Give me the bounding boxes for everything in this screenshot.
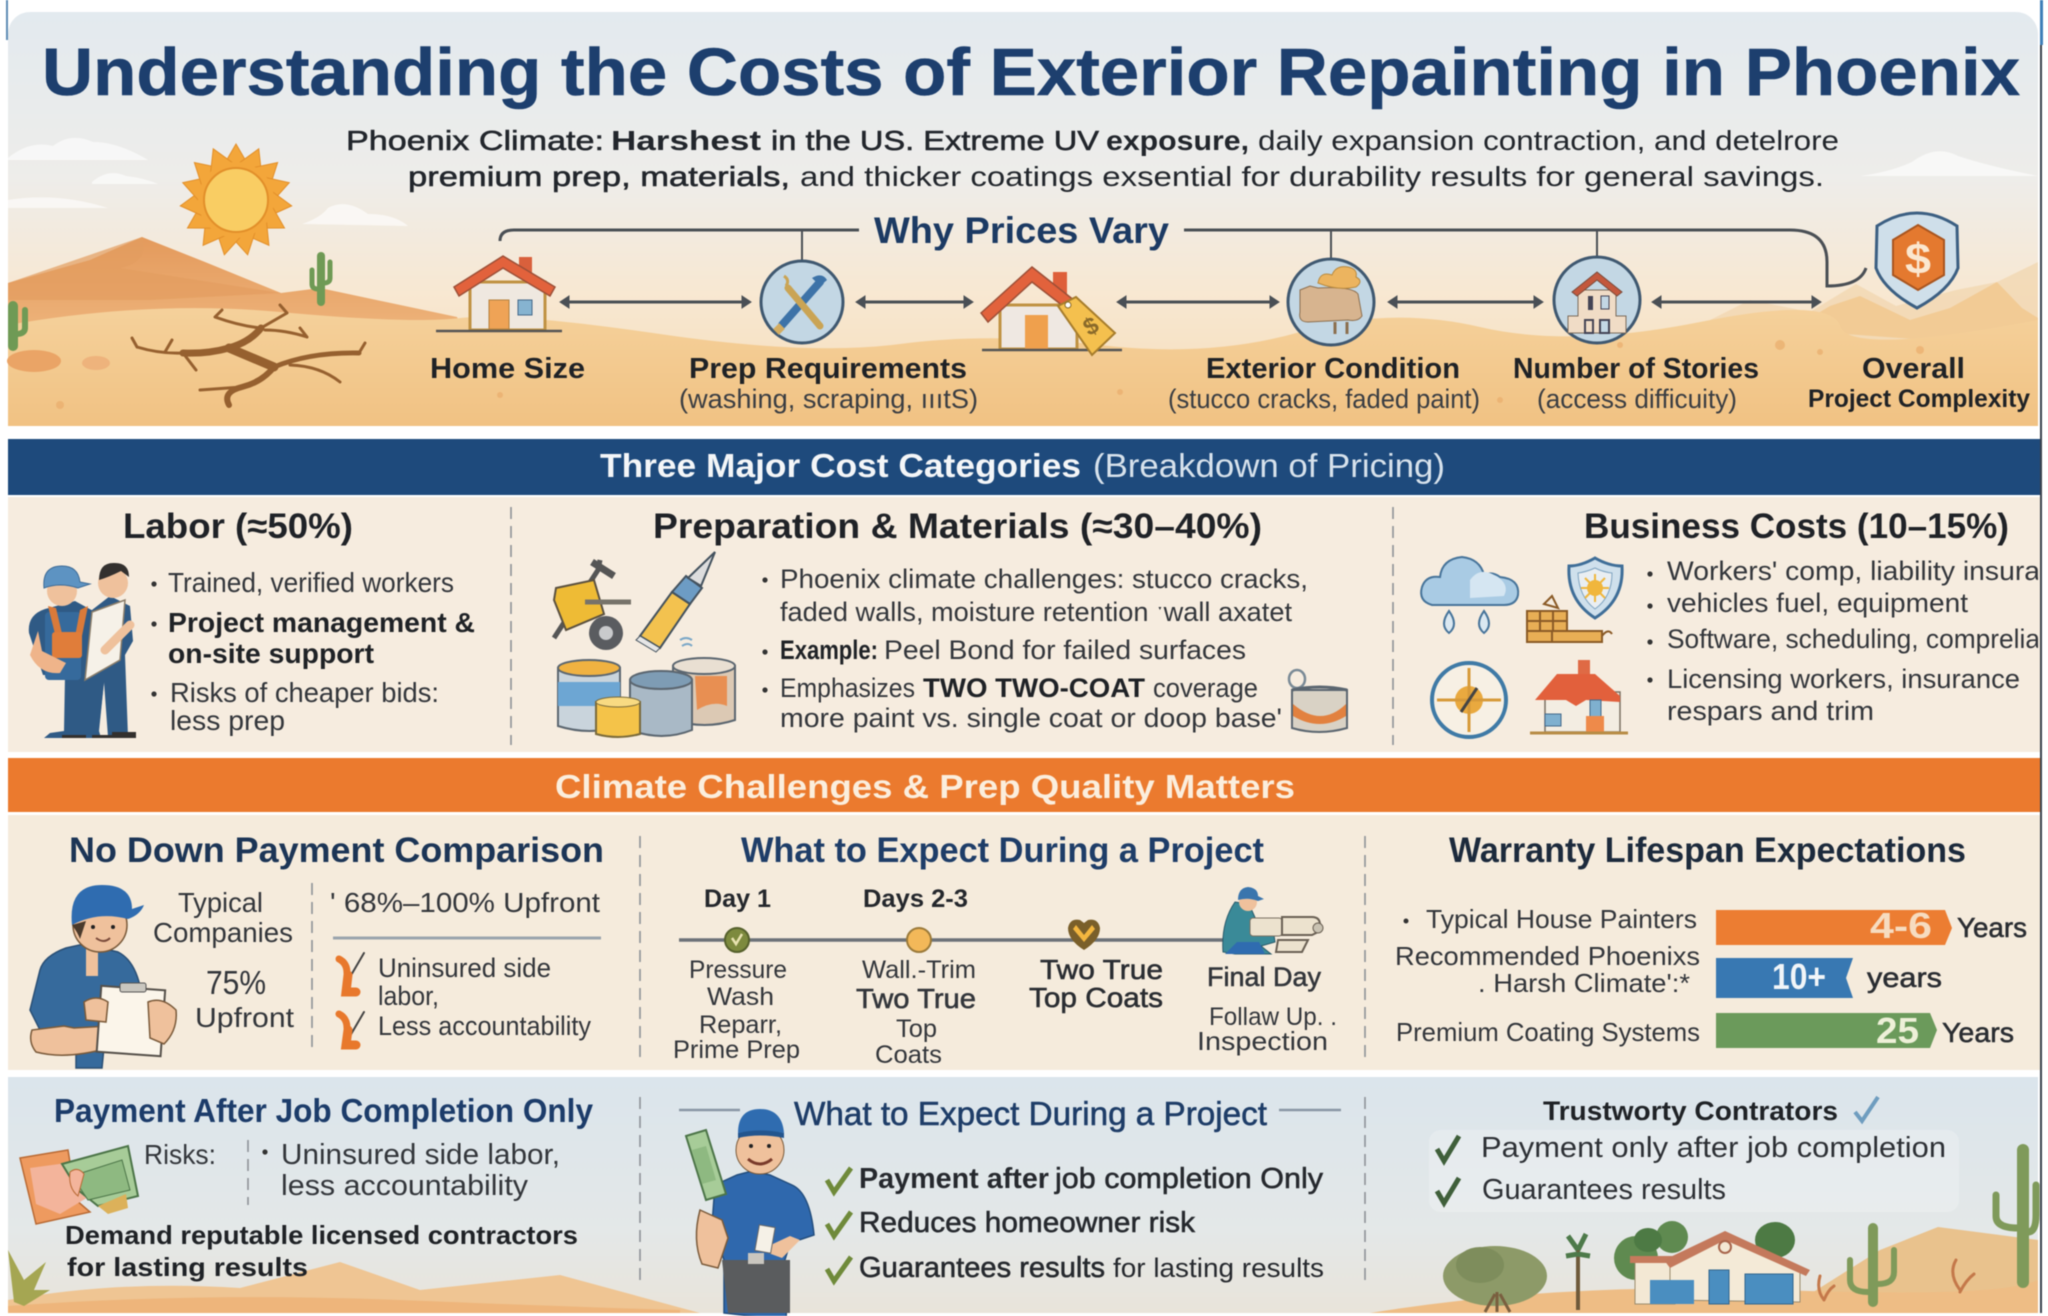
- icon: light check: [1855, 1097, 1878, 1121]
- factor labels: (washing, scraping, ıııtS): [679, 384, 978, 414]
- preparation bullet list: coverage: [1153, 673, 1258, 703]
- icon: two workers: [29, 563, 136, 738]
- column dividers upper: [511, 507, 1393, 745]
- bar: recommended 10+ years: years: [1867, 962, 1942, 993]
- arrows between factors: [560, 296, 1821, 308]
- icon: worker holding cash: [686, 1109, 814, 1316]
- day 1 steps: Reparr,: [699, 1011, 782, 1039]
- panel: business costs: [1421, 507, 2041, 737]
- day labels: Days 2-3: [863, 885, 968, 913]
- subtitle text block: Phoenix Climate:: [346, 125, 604, 156]
- labor bullet list: Trained, verified workers: [168, 567, 454, 598]
- checklist: Guarantees results: [859, 1252, 1105, 1284]
- bar: typical 4-6 years: 4-6: [1870, 905, 1932, 946]
- icon: rocks: [7, 350, 110, 372]
- risks text: Less accountability: [378, 1011, 591, 1041]
- typical companies stat: 75%: [206, 964, 266, 1001]
- icon: saguaro cacti: [1819, 1150, 2036, 1302]
- right hill: [1814, 1226, 2038, 1293]
- days 2-3 steps: Two True: [856, 983, 976, 1014]
- bar: premium 25 years: [1716, 1010, 2014, 1051]
- final day text: [1197, 962, 1337, 1056]
- icon: red roof house: [1530, 660, 1628, 733]
- factor labels: (access difficuity): [1537, 384, 1737, 414]
- risks list: Uninsured side labor,: [281, 1139, 560, 1171]
- business bullet list: respars and trim: [1667, 696, 1874, 726]
- title: Understanding the Costs of Exterior Repainting in Phoenix: [42, 35, 2020, 110]
- icon: shield with dollar: $: [1905, 235, 1931, 284]
- factor labels: [430, 353, 2030, 414]
- bar: premium 25 years: 25: [1876, 1010, 1919, 1051]
- days 2-3 steps: [856, 956, 976, 1069]
- icon: exterior condition: [1288, 259, 1374, 345]
- warranty labels: Typical House Painters: [1426, 904, 1697, 934]
- icon: house with price tag: [981, 267, 1122, 355]
- preparation bullet list: Emphasizes: [780, 673, 915, 703]
- day 1 steps: [673, 956, 800, 1064]
- heading: business costs: Business Costs (10–15%): [1584, 507, 2009, 546]
- dashed dividers: [640, 1097, 1365, 1280]
- labor bullet list: Risks of cheaper bids:: [170, 677, 439, 708]
- factor labels: Project Complexity: [1808, 385, 2030, 413]
- typical companies stat: Upfront: [195, 1002, 294, 1033]
- panel: preparation and materials: [554, 507, 1347, 737]
- icon: orange warning marks: [338, 953, 364, 1045]
- risks list: [262, 1139, 560, 1202]
- heading rules: [679, 1109, 1341, 1111]
- timeline markers: [725, 920, 1100, 952]
- typical companies stat: Companies: [153, 917, 293, 948]
- subtitle text block: and thicker coatings exsential for durability results for general savings.: [800, 161, 1824, 192]
- section bar: three major cost categories: [8, 439, 2040, 495]
- day labels: Day 1: [704, 885, 771, 913]
- labor bullet list: Project management &: [168, 607, 475, 638]
- upfront text: ' 68%–100% Upfront: [330, 887, 600, 918]
- panel: lower cost section background: [8, 815, 2040, 1070]
- rule: [333, 936, 601, 940]
- section bar: three major cost categories: Three Major Cost Categories: [600, 447, 1081, 484]
- subtitle text block: in the US. Extreme UV: [771, 125, 1099, 156]
- preparation bullet list: TWO TWO-COAT: [923, 673, 1146, 703]
- factor labels: Prep Requirements: [689, 353, 967, 385]
- business bullet list: vehicles fuel, equipment: [1667, 588, 1969, 618]
- factor labels: Home Size: [430, 353, 585, 385]
- checklist: [1437, 1132, 1946, 1206]
- icon: cracked earth: [132, 305, 365, 405]
- sand ground: [8, 308, 2038, 426]
- icon: home size house: [436, 256, 562, 331]
- panel: labor: [29, 507, 475, 738]
- landscape: bush and trees: [1443, 1221, 1795, 1312]
- bar: typical 4-6 years: Years: [1957, 912, 2027, 943]
- heading: trustworthy: Trustworty Contrators: [1543, 1096, 1838, 1126]
- top coats step: [1029, 954, 1163, 1013]
- business bullet list: Licensing workers, insurance: [1667, 664, 2020, 694]
- preparation bullet list: [762, 564, 1308, 733]
- timeline line: [679, 938, 1226, 942]
- icon: prep requirements tools: [761, 261, 843, 343]
- icon: shield with dollar: [1876, 213, 1958, 308]
- day 1 steps: Prime Prep: [673, 1036, 800, 1064]
- business bullet list: Software, scheduling, comprelia: [1667, 624, 2041, 654]
- heading: payment after job: Payment After Job Completion Only: [54, 1092, 594, 1129]
- icon: sun: [178, 143, 294, 258]
- heading: preparation: Preparation & Materials (≈30–40%): [653, 507, 1262, 546]
- risks text: Uninsured side: [378, 953, 551, 983]
- bar: recommended 10+ years: 10+: [1772, 956, 1826, 997]
- panel: payment after job completion: [20, 1092, 594, 1282]
- icon: worker with clipboard: [30, 885, 176, 1068]
- dunes left: [8, 236, 458, 324]
- checklist: job completion Only: [1054, 1163, 1324, 1195]
- labor bullet list: less prep: [170, 705, 285, 736]
- icon: hand with money: [20, 1146, 138, 1224]
- preparation bullet list: more paint vs. single coat or doop base': [780, 703, 1282, 733]
- panel: what to expect timeline: [673, 831, 1337, 1069]
- days 2-3 steps: Wall.-Trim: [862, 956, 976, 984]
- section bar: climate challenges: [8, 758, 2040, 812]
- icon: caulk tube: [636, 552, 715, 652]
- risks text: [378, 953, 591, 1041]
- subtitle text block: premium prep, materials,: [408, 161, 790, 192]
- panel: no down payment comparison: [30, 831, 604, 1068]
- preparation bullet list: Phoenix climate challenges: stucco cracks,: [780, 564, 1308, 594]
- icon: house with price tag: $: [1079, 311, 1104, 342]
- distant sand hills right: [1712, 262, 2038, 340]
- day 1 steps: Wash: [707, 983, 774, 1011]
- heading: labor: Labor (≈50%): [123, 507, 353, 546]
- top coats step: Two True: [1040, 954, 1163, 985]
- heading: comparison: No Down Payment Comparison: [69, 831, 604, 870]
- risks list: less accountability: [281, 1170, 529, 1202]
- dashed divider: [311, 883, 313, 1047]
- heading: what to expect: What to Expect During a Project: [794, 1095, 1267, 1132]
- call to action: Demand reputable licensed contractors: [65, 1220, 578, 1250]
- final day text: Inspection: [1197, 1026, 1328, 1056]
- factor labels: (stucco cracks, faded paint): [1168, 384, 1480, 414]
- preparation bullet list: Peel Bond for failed surfaces: [884, 635, 1246, 665]
- checklist: Reduces homeowner risk: [859, 1207, 1196, 1239]
- section bar: climate challenges: Climate Challenges & Prep Quality Matters: [555, 768, 1295, 805]
- icon: final day worker: [1223, 887, 1323, 954]
- dashed divider: [247, 1140, 249, 1205]
- icon: desert house: [1630, 1231, 1810, 1304]
- subtitle text block: daily expansion contraction, and detelrore: [1258, 125, 1839, 156]
- heading: why prices vary: Why Prices Vary: [874, 210, 1169, 251]
- labor bullet list: on-site support: [168, 638, 374, 669]
- factor labels: Exterior Condition: [1206, 353, 1460, 385]
- factor labels: Number of Stories: [1513, 353, 1759, 385]
- checklist: Guarantees results: [1482, 1174, 1726, 1206]
- final day text: Final Day: [1207, 962, 1321, 992]
- icon: saguaro cactus: [312, 256, 330, 302]
- risks text: labor,: [378, 981, 439, 1011]
- call to action: [65, 1220, 578, 1282]
- clouds: [8, 138, 2038, 226]
- preparation bullet list: Example:: [780, 635, 878, 665]
- warranty labels: Premium Coating Systems: [1396, 1017, 1700, 1047]
- ground right: [1371, 1288, 1816, 1314]
- final day text: Follaw Up. .: [1209, 1003, 1337, 1031]
- call to action: for lasting results: [67, 1252, 308, 1282]
- typical companies stat: [153, 887, 294, 1033]
- icon: bricks: [1527, 596, 1612, 642]
- panel: warranty lifespan: [1395, 831, 2027, 1051]
- panel: cost category background: [8, 497, 2040, 752]
- bar: typical 4-6 years: [1716, 905, 2027, 946]
- business bullet list: Workers' comp, liability insura: [1667, 556, 2041, 586]
- bar: premium 25 years: Years: [1942, 1017, 2014, 1048]
- subtitle text block: exposure,: [1106, 125, 1249, 156]
- day 1 steps: Pressure: [689, 956, 787, 984]
- day labels: [704, 885, 968, 913]
- checklist: [827, 1163, 1324, 1284]
- panel: trustworthy contractors: [1429, 1096, 2036, 1312]
- subtitle text block: [346, 125, 1839, 192]
- factor labels: Overall: [1862, 353, 1965, 385]
- icon: paint can: [1289, 670, 1347, 732]
- days 2-3 steps: Coats: [875, 1041, 942, 1069]
- soft highlight: [1429, 1130, 1959, 1212]
- panel: bottom section background: [8, 1077, 2040, 1313]
- icon: small cactus left: [13, 306, 25, 346]
- warranty labels: . Harsh Climate':*: [1478, 968, 1690, 998]
- days 2-3 steps: Top: [896, 1015, 937, 1043]
- dunes bottom left: [8, 1262, 700, 1313]
- labor bullet list: [151, 567, 475, 736]
- icon: rain cloud: [1421, 557, 1518, 633]
- bracket connector: [500, 230, 1866, 286]
- typical companies stat: Typical: [178, 887, 263, 918]
- icon: pressure washer: [554, 560, 631, 650]
- checklist: for lasting results: [1113, 1253, 1324, 1283]
- subtitle text block: Harshest: [611, 125, 761, 156]
- panel: what to expect checklist: [640, 1095, 1365, 1316]
- heading: warranty: Warranty Lifespan Expectations: [1449, 831, 1966, 870]
- section bar: three major cost categories: (Breakdown of Pricing): [1093, 447, 1445, 484]
- bar: recommended 10+ years: [1716, 956, 1942, 998]
- preparation bullet list: faded walls, moisture retention ˑwall axatet: [780, 597, 1292, 627]
- checklist: Payment after: [859, 1163, 1049, 1195]
- palm plant: [8, 1250, 50, 1306]
- column dividers lower: [640, 836, 1365, 1063]
- business bullet list: [1647, 556, 2041, 726]
- risks label: Risks:: [144, 1139, 216, 1170]
- top coats step: Top Coats: [1029, 982, 1163, 1013]
- icon: number of stories: [1554, 257, 1640, 343]
- warranty labels: [1395, 904, 1700, 1047]
- heading: what to expect: What to Expect During a Project: [741, 831, 1264, 870]
- warranty labels: Recommended Phoenixs: [1395, 941, 1700, 971]
- panel: header desert scene: [8, 12, 2048, 426]
- icon: paint buckets: [558, 658, 735, 737]
- speckles: [56, 340, 2004, 409]
- icon: shield with sun: [1569, 558, 1622, 618]
- icon: compass: [1432, 663, 1506, 737]
- checklist: Payment only after job completion: [1481, 1132, 1946, 1164]
